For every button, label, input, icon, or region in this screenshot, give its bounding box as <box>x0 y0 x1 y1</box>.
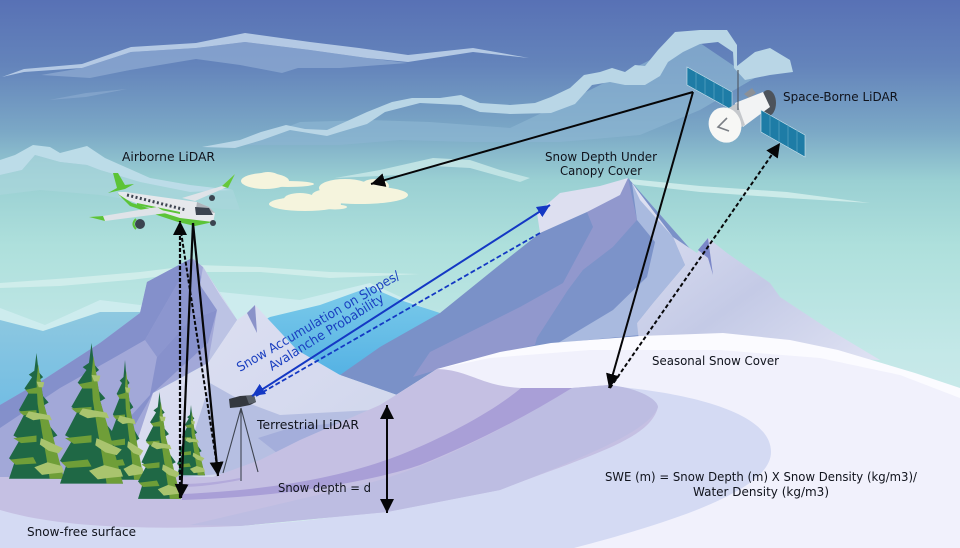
satellite <box>687 67 805 157</box>
foreground snow field <box>396 333 960 548</box>
rear dish <box>760 90 776 116</box>
label: snow depth: Snow depth = d <box>278 480 371 495</box>
cream clouds <box>241 172 408 211</box>
label: snow depth under canopy cover: Canopy Cover <box>560 163 643 178</box>
wispy clouds <box>0 30 870 288</box>
terrestrial lidar tripod <box>223 395 258 481</box>
arrow: terrestrial lidar to mountain <box>252 205 550 396</box>
dashed arrow: airplane to snow surface return <box>181 232 218 472</box>
formula: snow water equivalent: SWE (m) = Snow Depth (m) X Snow Density (kg/m3)/ <box>605 469 918 484</box>
dashed arrow: mountain to terrestrial lidar <box>256 233 540 396</box>
body <box>735 92 770 127</box>
near engine <box>135 219 145 229</box>
tree 2 <box>60 343 123 484</box>
lavender ground <box>0 369 771 548</box>
tree 3 <box>106 360 144 480</box>
tree 1 <box>9 353 64 479</box>
formula: snow water equivalent <box>605 469 918 499</box>
label: seasonal snow cover: Seasonal Snow Cover <box>652 353 780 368</box>
cabin windows <box>127 195 186 210</box>
antenna <box>737 70 739 110</box>
formula: snow water equivalent: Water Density (kg/m3) <box>693 484 829 499</box>
arrow: airplane to snow-free ground <box>181 223 193 498</box>
left mountain <box>0 258 397 480</box>
tree 4 <box>138 392 181 499</box>
arrow: airplane to snow surface <box>193 223 218 476</box>
dish <box>703 102 747 148</box>
big central mountain <box>340 178 880 400</box>
label: snow depth under canopy cover: Snow Depth Under <box>545 149 658 164</box>
solar panel left <box>687 67 732 110</box>
fuselage <box>118 192 215 223</box>
label: snow-free surface: Snow-free surface <box>27 524 136 539</box>
camera <box>229 395 256 408</box>
label: snow accumulation and avalanche probability: Snow Accumulation on Slopes/ <box>234 268 403 375</box>
arrow: snow depth <box>386 405 388 513</box>
far wing <box>182 174 235 201</box>
dashed arrow: ground to airplane <box>179 221 181 498</box>
distant blue mountains <box>0 283 440 420</box>
label: terrestrial lidar: Terrestrial LiDAR <box>256 417 359 432</box>
label: airborne lidar: Airborne LiDAR <box>122 149 215 164</box>
tail <box>108 173 134 193</box>
label: snow accumulation and avalanche probability: Avalanche Probability <box>266 291 387 374</box>
arrow: satellite to snow surface <box>609 92 693 388</box>
label: snow depth under canopy cover <box>545 149 658 178</box>
far engine <box>209 195 215 201</box>
pine trees <box>9 343 205 499</box>
solar panel right <box>761 110 805 157</box>
dashed arrow: snow surface to satellite <box>610 143 780 388</box>
tripod legs <box>223 408 258 481</box>
arrow: satellite to cloud <box>371 92 693 184</box>
label: space-borne lidar: Space-Borne LiDAR <box>783 89 898 104</box>
tree 5 <box>177 405 205 475</box>
airplane <box>89 173 235 229</box>
near wing <box>89 207 167 221</box>
